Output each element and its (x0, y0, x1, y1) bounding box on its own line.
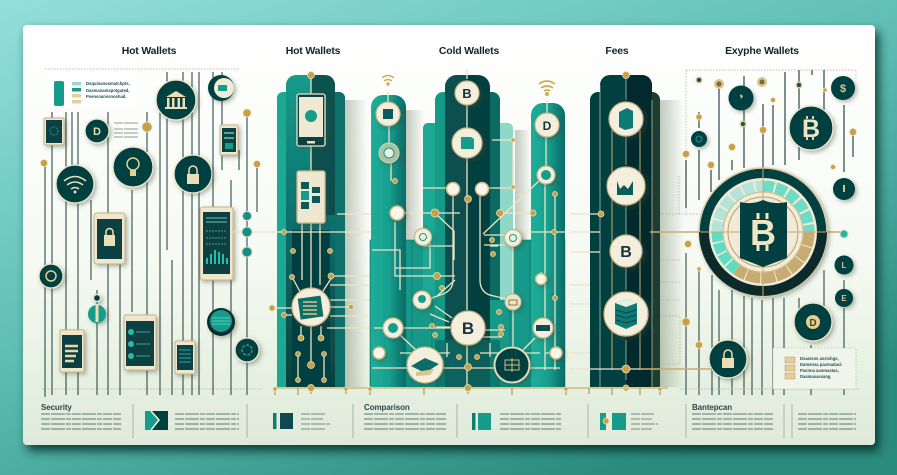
note icons (785, 357, 795, 379)
divider (133, 404, 247, 438)
teal node (840, 230, 848, 238)
node: wallet tag (505, 294, 521, 310)
icon: small teal coin (691, 131, 707, 147)
node: seal three (504, 230, 522, 246)
hub icon (292, 288, 330, 326)
right tower (531, 103, 565, 387)
node: seal two (414, 228, 432, 246)
gold nodes (392, 138, 558, 370)
icon: chip (208, 75, 234, 101)
node: white three (476, 182, 488, 196)
icon: D coin: D (93, 126, 101, 138)
icon: bank (156, 80, 196, 120)
icon: at sign (39, 264, 63, 288)
icon: info coin (833, 178, 855, 200)
wifi signal right (539, 81, 555, 95)
node: wallet (376, 102, 400, 126)
icon: recycle (235, 338, 259, 362)
text lines (500, 414, 562, 429)
lower gold nodes (622, 365, 630, 391)
connector nodes (233, 212, 272, 257)
icon: E coin (835, 289, 853, 307)
icon: phone lock (94, 213, 125, 264)
fees node: bitcoin (610, 235, 642, 267)
icon: lock coin (709, 340, 747, 378)
node: seal (379, 143, 399, 163)
section headings (122, 45, 799, 57)
pin (40, 160, 48, 166)
node: white two (446, 182, 460, 196)
bitcoin symbol: B (750, 212, 776, 253)
fake caption (114, 123, 138, 137)
icon: teal drop (88, 294, 106, 323)
mid tower (435, 92, 500, 387)
node: document (452, 128, 482, 158)
note text: Dsasisns assichgs, (800, 356, 839, 361)
pin (142, 122, 152, 132)
node: D coin (535, 113, 559, 137)
left node (598, 211, 604, 217)
phone one (297, 94, 325, 146)
icon: tablet chart (200, 207, 233, 280)
note icon (54, 81, 64, 106)
icon: D coin large: D (809, 318, 817, 329)
phone two (297, 171, 325, 223)
connector lines (269, 214, 437, 382)
icon: lock (174, 155, 212, 193)
icon: L coin (834, 256, 854, 274)
icon: key coin (728, 86, 754, 110)
footer: fees and exchange (588, 403, 856, 438)
node: gauge (533, 318, 553, 338)
text lines (692, 414, 773, 429)
heading: hot wallets two: Hot Wallets (286, 45, 341, 57)
heading: hot wallets one: Hot Wallets (122, 45, 177, 57)
panel: security network (39, 69, 272, 397)
fees node: building (609, 102, 643, 136)
node: bitcoin top: B (462, 86, 472, 101)
panel: hot wallet column (269, 72, 437, 387)
heading: fees: Fees (605, 45, 629, 57)
note text: Pasnna ausmastas, (800, 368, 839, 373)
circuit lines (372, 70, 566, 387)
pin (254, 160, 260, 168)
divider (588, 404, 792, 438)
icon: phone (220, 125, 238, 155)
node: white six (550, 347, 562, 359)
node: white five (373, 347, 385, 359)
node: bitcoin hub: B (462, 319, 474, 338)
top node (622, 72, 630, 78)
pin (243, 109, 251, 117)
node circles (373, 81, 562, 383)
node: dark building (494, 348, 530, 382)
chevron icon (145, 411, 168, 430)
icon: bulb (113, 147, 153, 187)
note text: Damsnsa pasmadacl. (800, 362, 843, 367)
icon: E coin: E (841, 294, 847, 303)
heading: exchange wallets: Exyphe Wallets (725, 45, 799, 57)
footer: comparison (273, 403, 562, 438)
icon: dollar coin: $ (840, 83, 846, 95)
text lines (798, 414, 856, 429)
panel: cold wallet columns (370, 70, 566, 387)
node: teal three (383, 318, 403, 338)
node: cash stack (407, 347, 443, 383)
note box (48, 72, 136, 108)
text lines (301, 414, 330, 429)
icon block (273, 413, 293, 429)
icon: wifi (56, 165, 94, 203)
light back tower (423, 123, 513, 300)
note text: Dasmasassang (800, 374, 831, 379)
icon: dollar coin (831, 76, 855, 100)
base rail (273, 384, 668, 395)
node: white four (536, 274, 546, 284)
icon: bitcoin coin: B (802, 115, 820, 143)
icon: phone list (60, 330, 84, 372)
note box right (773, 348, 856, 389)
node: D coin: D (543, 119, 552, 133)
small pins (682, 76, 856, 348)
left tower (371, 95, 406, 387)
node: teal (537, 166, 555, 184)
node: white one (390, 206, 404, 220)
heading: security: Security (41, 403, 72, 412)
ring emblem (699, 168, 827, 296)
text lines (175, 414, 239, 429)
note text: Dsquinanosmatchpts, (86, 81, 130, 86)
icon: phone with list (124, 315, 156, 370)
icon: teal disc (207, 308, 235, 336)
left connectors (570, 214, 665, 388)
panel: fees column (570, 70, 684, 391)
note text (800, 356, 843, 379)
fees node: server (604, 292, 648, 336)
back plate (370, 240, 565, 387)
icon: small phone (175, 341, 195, 374)
text lines (631, 414, 658, 429)
divider (353, 404, 457, 438)
icon: tablet (44, 118, 64, 145)
icon block (600, 413, 626, 430)
text lines (364, 414, 446, 429)
ring connector line (640, 232, 842, 369)
node: bitcoin hub (451, 311, 485, 345)
divider (685, 404, 687, 438)
node: bitcoin top (455, 81, 479, 105)
heading: cold wallets: Cold Wallets (439, 45, 499, 57)
fees node: bitcoin: B (620, 244, 632, 261)
icon: bitcoin coin (789, 106, 833, 150)
text lines (41, 414, 121, 429)
icon block (472, 413, 491, 430)
note box: Psensnanssnoshad. (86, 94, 126, 99)
node (308, 72, 314, 78)
footer: security (41, 403, 247, 438)
node: teal two (413, 291, 431, 309)
icon: D coin (85, 119, 109, 143)
fees node: chart (607, 167, 645, 205)
note box: Dasmanamspotgated, (86, 88, 130, 93)
dark tower (445, 75, 490, 387)
shield (740, 200, 787, 267)
icon: D coin large (794, 303, 832, 341)
heading: exchange footer: Bantepcan (692, 403, 732, 412)
wifi signal left (382, 76, 394, 85)
icon: L coin: L (842, 261, 847, 270)
panel: exchange network (640, 70, 858, 395)
heading: comparison: Comparison (364, 403, 410, 412)
